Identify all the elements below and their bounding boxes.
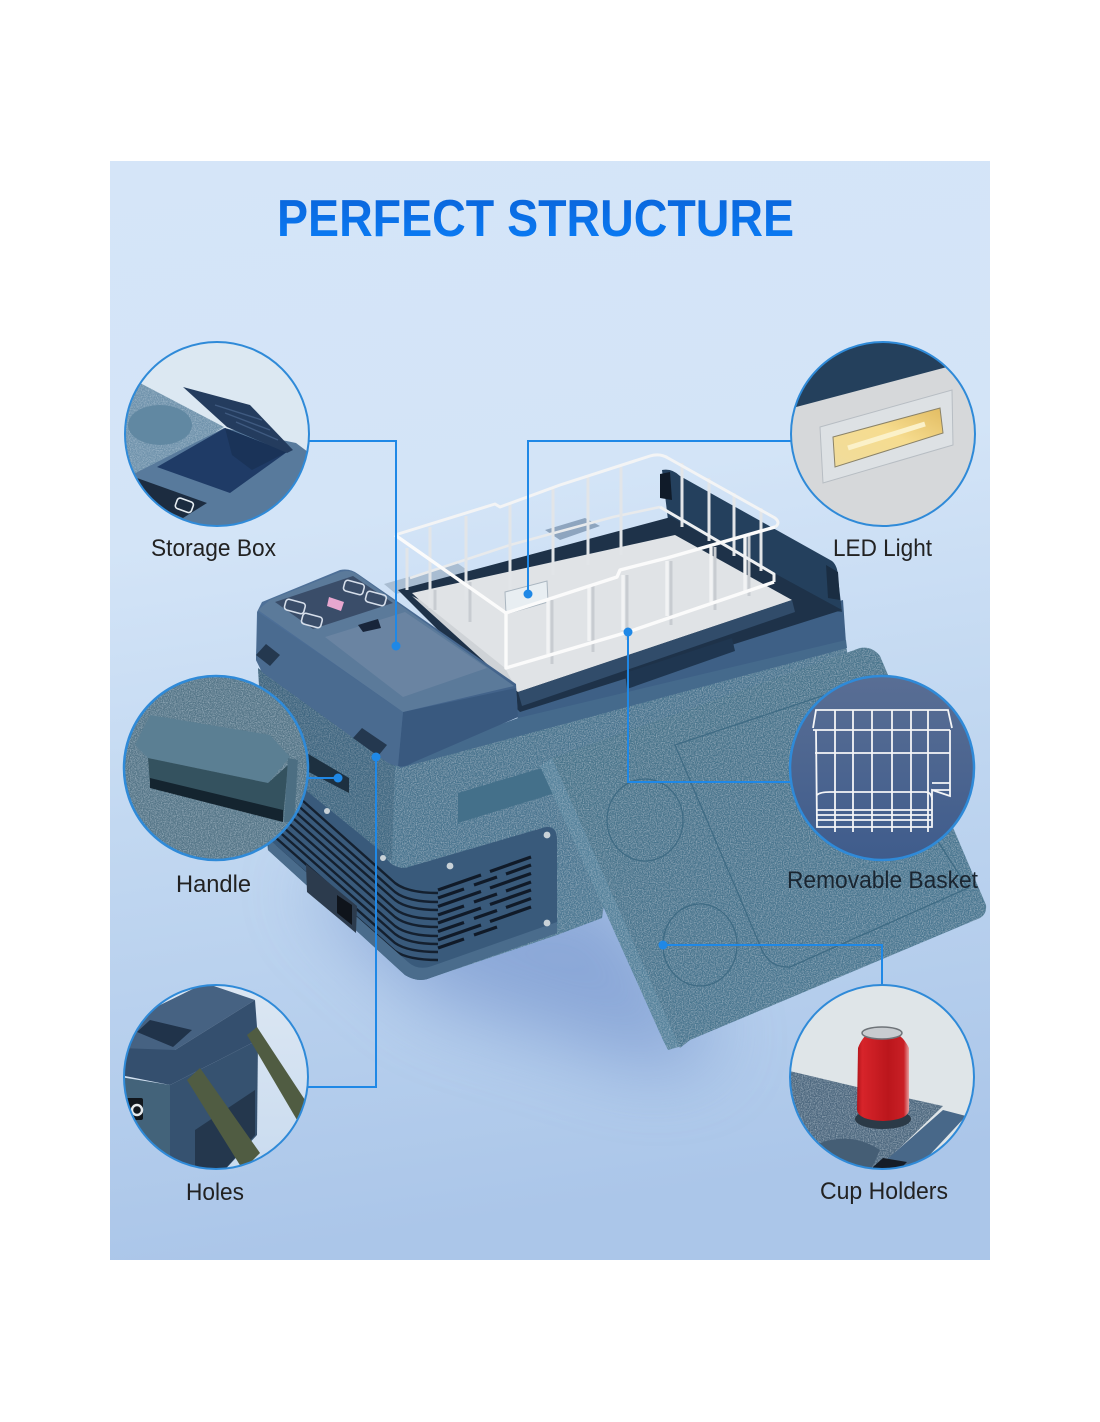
line: removable basket — [628, 632, 792, 782]
rim and deck — [384, 518, 847, 768]
title: PERFECT STRUCTURE — [277, 190, 794, 248]
LED light in fridge — [505, 581, 548, 614]
control block — [256, 570, 518, 766]
side handle slot — [305, 752, 349, 793]
detail: LED light — [790, 341, 976, 527]
label: handle: Handle — [176, 871, 251, 898]
line: storage box — [309, 441, 396, 646]
fridge body — [258, 640, 850, 980]
callout dots — [334, 590, 668, 950]
line: holes — [308, 757, 376, 1087]
line: cup holders — [663, 945, 882, 985]
vent panel and ribs — [258, 740, 557, 980]
rear wall and opening — [398, 470, 842, 712]
wire basket — [395, 455, 778, 668]
line: LED light — [528, 441, 792, 594]
power socket panel — [306, 864, 357, 933]
line: handle — [305, 777, 338, 779]
detail: removable basket — [790, 676, 974, 860]
detail: storage box — [118, 340, 320, 530]
label: storage box: Storage Box — [151, 535, 276, 562]
label: removable basket: Removable Basket — [787, 867, 978, 894]
touch control panel — [275, 576, 393, 629]
lid cup recesses — [607, 690, 968, 986]
label: cup holders: Cup Holders — [820, 1178, 948, 1205]
label: LED light: LED Light — [833, 535, 932, 562]
detail: handle — [120, 672, 312, 864]
removable lid — [540, 648, 986, 1050]
storage box lid — [325, 612, 487, 697]
front carry handle — [625, 638, 735, 689]
detail: holes — [120, 980, 312, 1175]
detail: cup holders — [785, 980, 978, 1174]
soda can — [857, 1027, 909, 1121]
background panel — [110, 161, 990, 1260]
portable fridge — [256, 455, 986, 1050]
callout lines — [305, 441, 882, 1087]
label: holes: Holes — [186, 1179, 244, 1206]
